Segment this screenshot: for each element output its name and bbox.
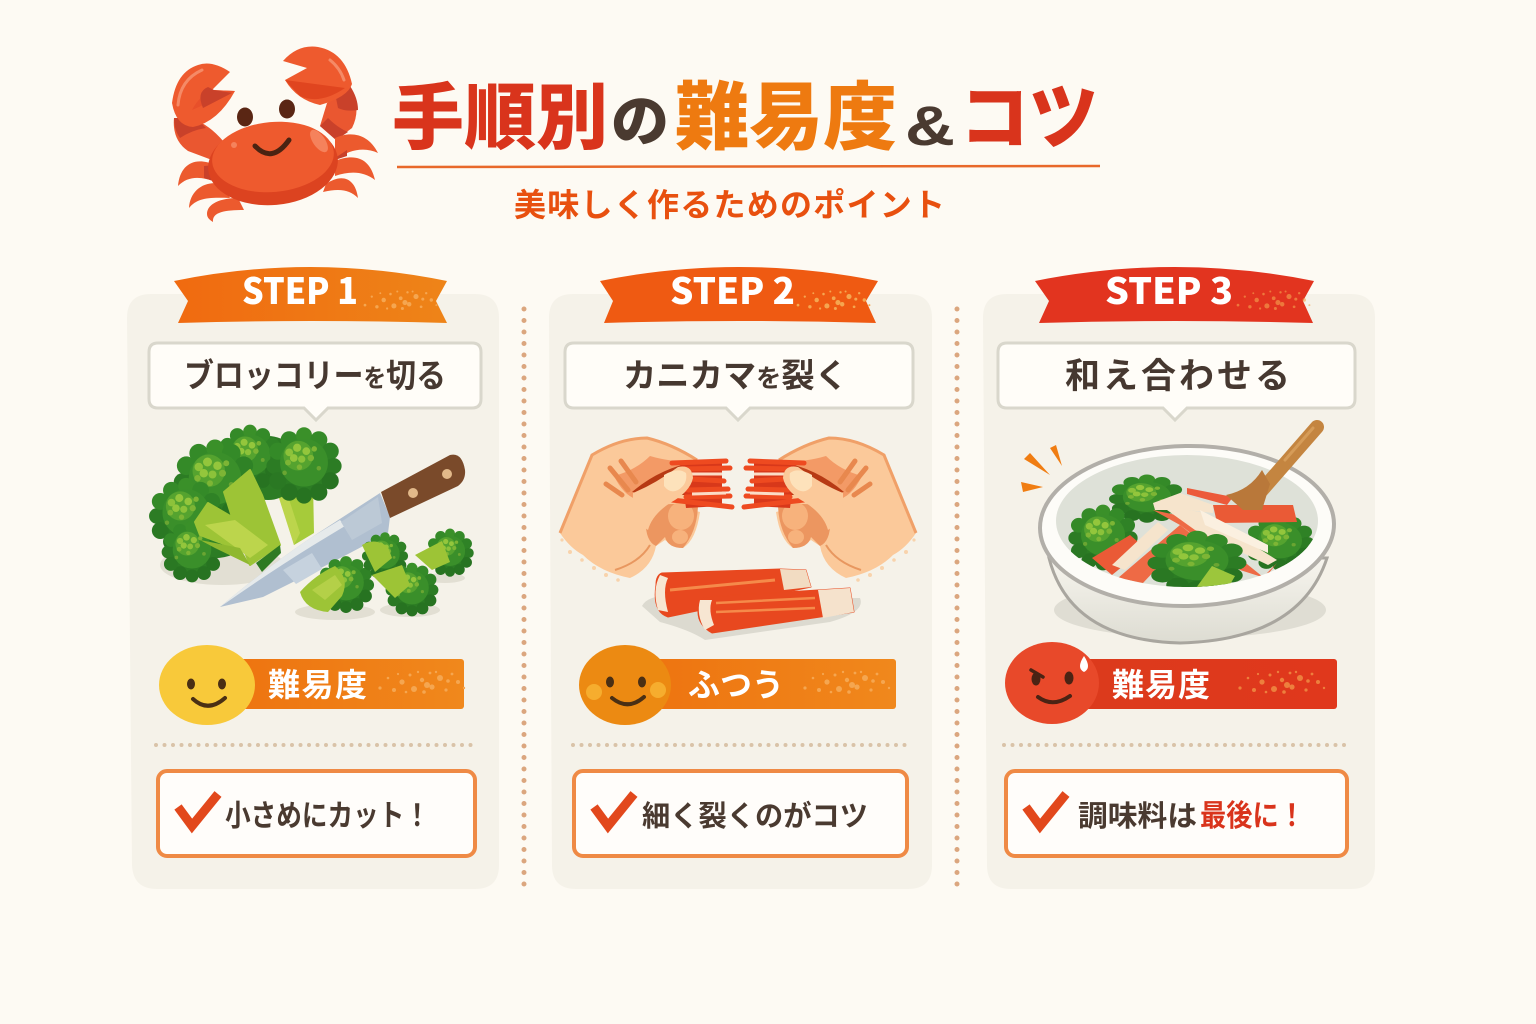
- panel: step 1: [127, 263, 499, 889]
- panel: step 2: [549, 263, 932, 889]
- speech label: [149, 343, 481, 420]
- ribbon: step 3: [1035, 263, 1314, 323]
- right hand: [744, 438, 916, 582]
- icon: hard smiley: [1005, 642, 1099, 724]
- panel background: [549, 294, 932, 889]
- tip box: [574, 771, 907, 856]
- dotted separator: [156, 743, 478, 747]
- icon: easy smiley: [159, 645, 255, 725]
- illustration: mixing bowl: [1021, 427, 1335, 643]
- title: 難易度: [675, 76, 897, 159]
- illustration: broccoli and knife: [149, 425, 474, 620]
- dotted separator: [1004, 743, 1350, 747]
- title: &: [905, 94, 955, 157]
- title: コツ: [960, 79, 1098, 159]
- tip box: 細く裂くのがコツ: [642, 799, 868, 833]
- tip box: 小さめにカット！: [225, 800, 430, 833]
- left hand: [560, 438, 732, 582]
- ribbon: step 1: STEP 1: [242, 263, 358, 315]
- ribbon: step 3: STEP 3: [1105, 263, 1233, 315]
- accent marks: [1021, 445, 1062, 492]
- salad: [1068, 475, 1315, 594]
- ribbon: step 1: [174, 263, 447, 323]
- speech label: [565, 343, 913, 420]
- knife: [220, 455, 465, 607]
- subtitle: 美味しく作るためのポイント: [514, 187, 945, 223]
- dotted separator: [573, 743, 908, 747]
- tip box: 調味料は: [1078, 800, 1197, 833]
- title: 手順別: [392, 79, 608, 159]
- ribbon: step 2: [600, 263, 878, 323]
- icon: check: [1026, 794, 1066, 826]
- speech label: カニカマを裂く: [623, 357, 848, 394]
- difficulty badge: [159, 645, 465, 725]
- icon: check: [178, 794, 218, 826]
- tip box: 最後に！: [1200, 800, 1305, 833]
- icon: normal smiley: [579, 645, 671, 725]
- title underline: [397, 166, 1100, 167]
- difficulty badge: 難易度: [268, 667, 367, 703]
- crab sticks: [642, 569, 861, 640]
- speech label: [998, 343, 1355, 420]
- difficulty badge: [1005, 642, 1337, 724]
- icon: crab mascot: [172, 47, 378, 222]
- spoon: [1226, 427, 1317, 510]
- difficulty badge: ふつう: [688, 667, 784, 703]
- panel background: [127, 294, 499, 889]
- difficulty badge: [579, 645, 896, 725]
- panel: step 3: [983, 263, 1375, 889]
- tip box: [158, 771, 475, 856]
- title: [392, 76, 1098, 159]
- tip box: [1006, 771, 1347, 856]
- speech label: 和え合わせる: [1065, 357, 1290, 396]
- speech label: ブロッコリーを切る: [184, 357, 446, 394]
- title: の: [611, 90, 669, 153]
- divider right: [954, 309, 960, 886]
- illustration: hands tearing crab sticks: [560, 438, 916, 640]
- icon: check: [594, 794, 634, 826]
- divider left: [522, 309, 526, 886]
- panel background: [983, 294, 1375, 889]
- difficulty badge: 難易度: [1112, 667, 1210, 703]
- ribbon: step 2: STEP 2: [670, 263, 795, 315]
